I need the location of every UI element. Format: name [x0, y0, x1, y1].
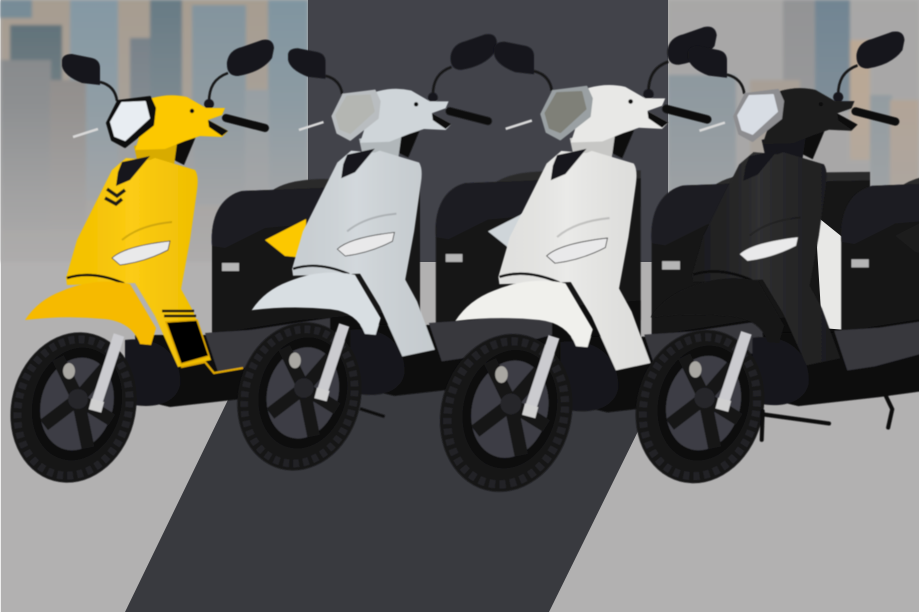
dark centre panel [308, 0, 668, 262]
left city skyline [0, 0, 308, 262]
chevrons [105, 189, 125, 204]
yellow scooter [0, 40, 420, 497]
leg stripes and panel [162, 311, 243, 373]
diagonal dark band [125, 340, 683, 612]
white scooter [423, 27, 870, 507]
rear panel behind black scooter [815, 215, 846, 330]
centre stand [360, 409, 385, 417]
black scooter [619, 31, 919, 498]
stands [762, 384, 892, 440]
right city skyline [668, 0, 919, 262]
pale grey scooter [221, 34, 641, 485]
